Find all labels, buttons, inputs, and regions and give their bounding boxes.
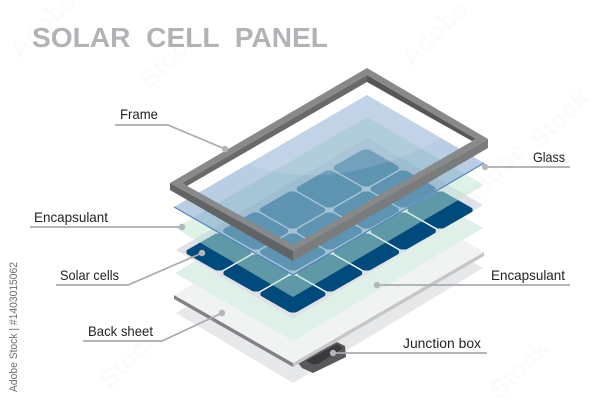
stock id vertical text: Adobe Stock | #1403015062	[8, 262, 20, 392]
label: Frame: Frame	[120, 106, 158, 122]
label: Solar cells: Solar cells	[60, 267, 119, 283]
label: Encapsulant left: Encapsulant	[34, 209, 108, 225]
icon: junction box	[298, 342, 346, 373]
label: Junction box	[330, 335, 487, 356]
label: Back sheet	[83, 310, 225, 341]
title: SOLAR CELL PANEL	[32, 22, 328, 53]
layer: solar cell backing	[176, 138, 483, 319]
layer: lower encapsulant	[175, 160, 483, 341]
watermark: Adobe	[453, 136, 531, 214]
label: Glass: Glass	[533, 149, 565, 165]
layer: back sheet	[174, 184, 484, 367]
label: Frame	[115, 106, 228, 152]
label: Solar cells	[56, 250, 205, 285]
label: Glass	[482, 149, 570, 170]
label: Junction box: Junction box	[403, 335, 481, 351]
label: Encapsulant left	[30, 209, 185, 230]
layer: solar cells	[183, 148, 476, 314]
label: Back sheet: Back sheet	[88, 323, 153, 339]
label: Encapsulant right: Encapsulant	[491, 267, 565, 283]
layer: glass	[174, 85, 484, 275]
frame	[170, 68, 488, 261]
shadow under back sheet	[176, 200, 483, 383]
label: Encapsulant right	[374, 267, 570, 288]
watermark: Stock	[523, 83, 595, 154]
watermark: Stock	[133, 23, 205, 94]
watermark: Stock	[93, 323, 165, 394]
layer: upper encapsulant	[175, 117, 484, 297]
